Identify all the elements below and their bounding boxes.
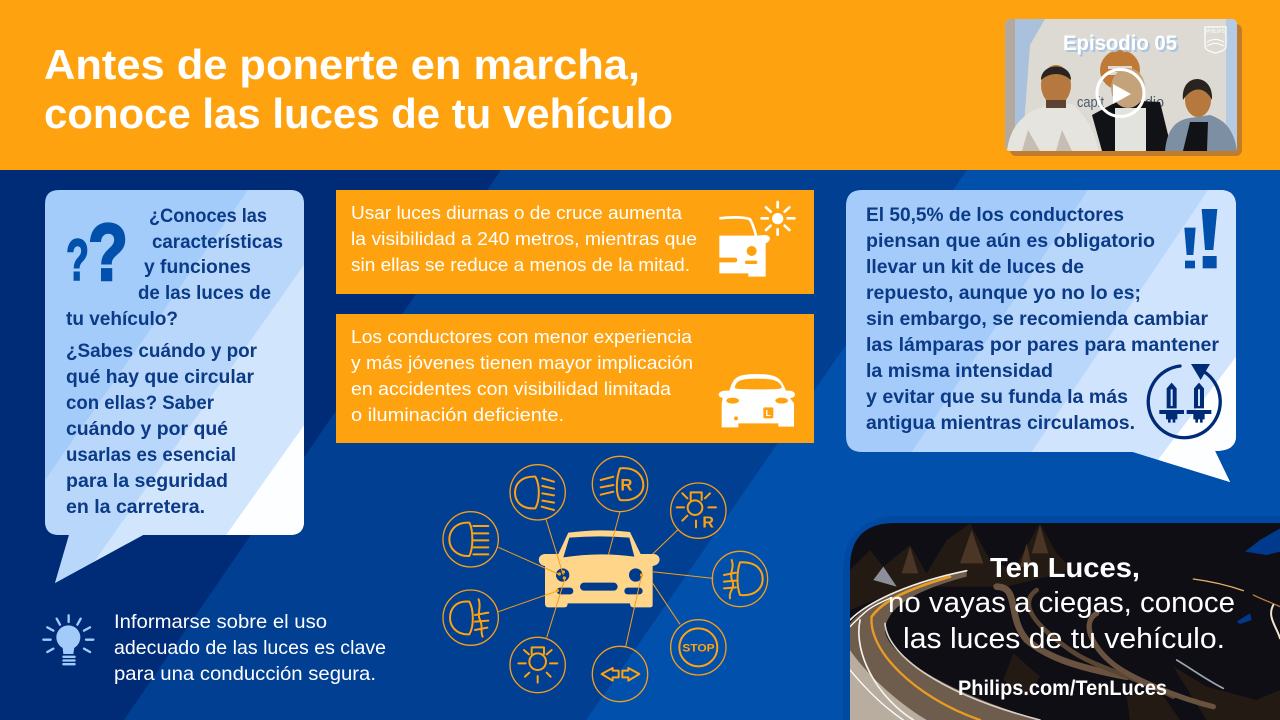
statistic text: la misma intensidad <box>866 360 1053 382</box>
safety note text: para una conducción segura. <box>114 663 376 685</box>
daytime lights text <box>351 202 697 275</box>
statistic text <box>866 204 1219 434</box>
daytime lights text: sin ellas se reduce a menos de la mitad. <box>351 254 690 275</box>
car illustration <box>539 530 660 607</box>
icon: learner car <box>719 374 795 427</box>
icon: stop light <box>679 628 717 666</box>
philips shield logo: PHILIPS <box>1206 29 1226 35</box>
question text: tu vehículo? <box>66 308 178 330</box>
young drivers text: Los conductores con menor experiencia <box>351 326 693 347</box>
play button <box>1097 70 1144 116</box>
question text: ¿Sabes cuándo y por <box>66 340 257 362</box>
icon: car with sun <box>717 202 794 277</box>
question text: y funciones <box>144 256 251 278</box>
statistic text: El 50,5% de los conductores <box>866 204 1124 226</box>
question text <box>66 205 283 518</box>
icon: question marks: ? <box>66 228 89 293</box>
statistic text: sin embargo, se recomienda cambiar <box>866 308 1208 330</box>
trees <box>850 523 1280 720</box>
question text: ¿Conoces las <box>149 205 267 227</box>
question text: qué hay que circular <box>66 366 254 388</box>
safety note text: Informarse sobre el uso <box>114 611 327 633</box>
icon: high beam <box>515 477 554 510</box>
light symbols diagram <box>443 456 768 702</box>
young drivers text: o iluminación deficiente. <box>351 404 564 425</box>
video thumbnail: dio <box>1145 94 1164 111</box>
question text: de las luces de <box>138 282 271 304</box>
campaign text: no vayas a ciegas, conoce <box>888 587 1235 619</box>
statistic text: repuesto, aunque yo no lo es; <box>866 282 1141 304</box>
panel: night road photo <box>840 516 1280 720</box>
question text: características <box>152 231 283 253</box>
episode label: Episodio 05 <box>1063 32 1177 55</box>
campaign text: Philips.com/TenLuces <box>958 677 1167 700</box>
question text: en la carretera. <box>66 496 205 518</box>
icon: bulb replacement cycle <box>1148 364 1220 438</box>
icon: position light <box>518 647 557 683</box>
episode label: Episodio 05 <box>1065 34 1179 57</box>
connector lines <box>498 512 713 647</box>
icon: stop light: STOP <box>682 642 715 654</box>
young drivers text: y más jóvenes tienen mayor implicación <box>351 352 693 373</box>
young drivers text <box>351 326 693 425</box>
safety note text: adecuado de las luces es clave <box>114 637 386 659</box>
statistic text: antigua mientras circulamos. <box>866 412 1135 434</box>
road surface <box>850 570 1040 720</box>
panel: statistic bubble <box>846 190 1236 482</box>
statistic text: las lámparas por pares para mantener <box>866 334 1219 356</box>
young drivers text: en accidentes con visibilidad limitada <box>351 378 672 399</box>
panel: daytime lights box <box>336 190 814 294</box>
statistic text: y evitar que su funda la más <box>866 386 1128 408</box>
title: conoce las luces de tu vehículo <box>44 90 673 137</box>
icon: learner car: L <box>766 408 772 418</box>
title <box>44 41 673 137</box>
icon: dipped beam <box>449 523 488 556</box>
header band <box>0 0 1280 170</box>
icon: rear position light: R <box>702 515 714 532</box>
light trails <box>850 571 1280 720</box>
question text: usarlas es esencial <box>66 444 236 466</box>
campaign text: las luces de tu vehículo. <box>903 623 1225 655</box>
campaign text <box>888 552 1235 700</box>
statistic text: piensan que aún es obligatorio <box>866 230 1155 252</box>
title: Antes de ponerte en marcha, <box>44 41 640 88</box>
philips shield logo <box>1205 27 1226 53</box>
icon: rear position light <box>677 492 716 532</box>
background diagonal bands <box>0 170 1280 720</box>
daytime lights text: la visibilidad a 240 metros, mientras que <box>351 228 697 249</box>
icon: question marks <box>66 208 128 298</box>
video thumbnail <box>1005 19 1242 156</box>
icon: reverse fog lamp <box>601 468 643 500</box>
statistic text: llevar un kit de luces de <box>866 256 1084 278</box>
icon: question marks: ? <box>88 208 128 298</box>
icon: front fog lamp <box>450 599 488 637</box>
icon: rear fog lamp <box>724 560 763 598</box>
panel: question bubble <box>45 190 304 583</box>
campaign text: Ten Luces, <box>990 552 1140 583</box>
panel: young drivers box <box>336 314 814 443</box>
safety note text <box>114 611 386 685</box>
daytime lights text: Usar luces diurnas o de cruce aumenta <box>351 202 683 223</box>
question text: con ellas? Saber <box>66 392 214 414</box>
icon: reverse fog lamp: R <box>620 476 632 495</box>
question text: para la seguridad <box>66 470 228 492</box>
question text: cuándo y por qué <box>66 418 228 440</box>
video thumbnail: capit <box>1077 94 1105 111</box>
icon: exclamation marks <box>1184 209 1217 268</box>
icon: turn signals <box>602 668 639 681</box>
icon: light bulb <box>43 615 93 665</box>
